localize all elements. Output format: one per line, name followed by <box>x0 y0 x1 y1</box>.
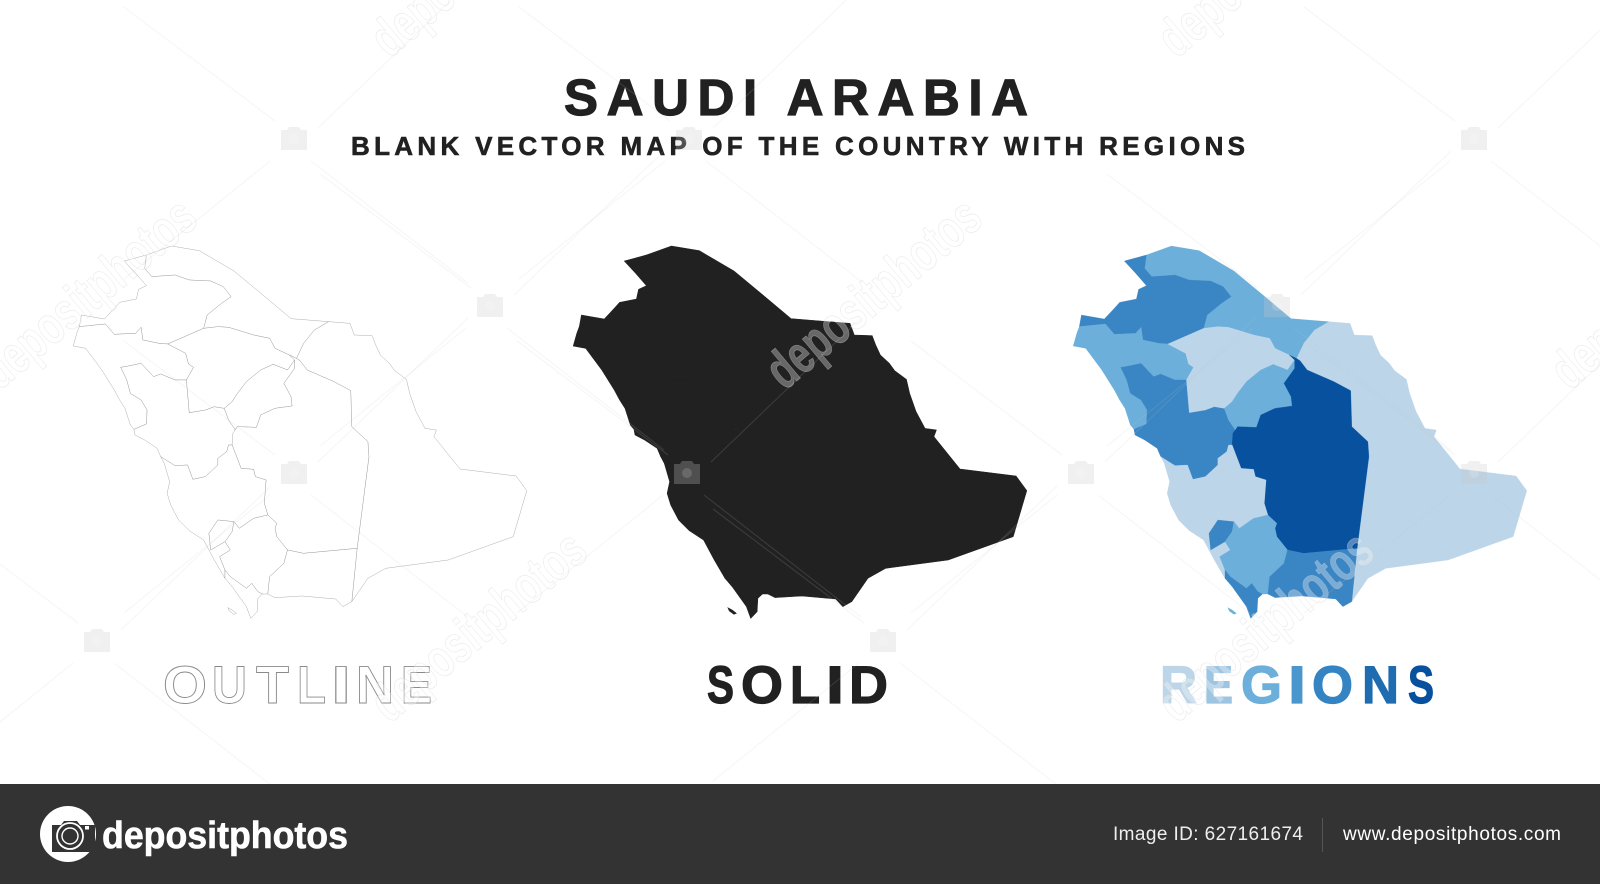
icon: camera logo <box>40 806 96 862</box>
label: outline: I <box>331 656 351 715</box>
label: outline: N <box>356 656 394 715</box>
subtitle: BLANK VECTOR MAP OF THE COUNTRY WITH REGIONS <box>351 131 1245 161</box>
image id: Image ID: 627161674 <box>1113 824 1303 845</box>
label: regions: E <box>1204 656 1233 715</box>
outline map <box>73 246 527 618</box>
label: regions: O <box>1312 656 1353 715</box>
label: outline: O <box>163 656 207 715</box>
label: outline <box>163 656 432 715</box>
watermark layer: depositphotos <box>359 519 598 733</box>
label: regions: S <box>1408 656 1434 715</box>
watermark layer: depositphotos <box>754 186 993 400</box>
solid map <box>573 246 1027 618</box>
logo wordmark: depositphotos <box>102 815 348 857</box>
website url: www.depositphotos.com <box>1342 824 1561 845</box>
title: SAUDI ARABIA <box>564 69 1028 126</box>
label: solid: O <box>741 656 783 715</box>
label: solid: L <box>790 656 820 715</box>
regions map <box>1073 246 1527 618</box>
label: outline: L <box>297 656 326 715</box>
label: solid: D <box>849 656 888 715</box>
label: outline: T <box>256 656 289 715</box>
footer bar <box>0 784 1600 884</box>
label: solid: S <box>707 656 734 715</box>
watermark layer: depositphotos <box>1146 519 1385 733</box>
label: regions: G <box>1241 656 1282 715</box>
label: regions: R <box>1160 656 1197 715</box>
label: regions <box>1160 656 1434 715</box>
label: outline: E <box>401 656 432 715</box>
label: solid <box>707 656 888 715</box>
label: solid: I <box>826 656 844 715</box>
label: outline: U <box>212 656 247 715</box>
label: regions: I <box>1288 656 1306 715</box>
label: regions: N <box>1362 656 1399 715</box>
